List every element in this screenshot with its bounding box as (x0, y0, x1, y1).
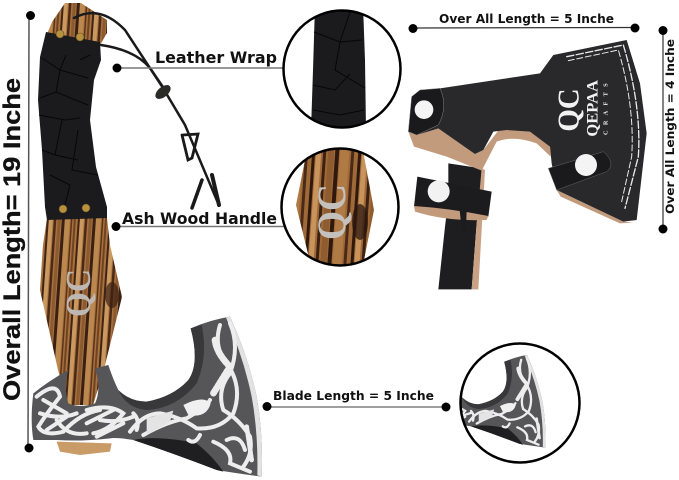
label: leather wrap: Leather Wrap (155, 48, 277, 67)
leather cord (74, 13, 219, 208)
leather sheath (408, 40, 647, 289)
rivet holes (408, 88, 611, 190)
sheath body (408, 40, 647, 222)
detail circle: leather wrap (284, 5, 400, 130)
dimension: sheath width (408, 11, 640, 33)
rivets (56, 30, 90, 213)
sheath logo: QC (551, 88, 585, 132)
handle logo: QC (59, 269, 98, 317)
detail circle: ash wood handle: QC (309, 184, 354, 240)
axe illustration (32, 3, 262, 477)
detail circle: ash wood handle (282, 145, 398, 270)
dark burn mark (105, 282, 119, 308)
strap loop (414, 177, 492, 232)
sheath lining (408, 125, 551, 171)
cord knot (153, 82, 173, 102)
leather wrap (38, 32, 107, 220)
lower wood handle (40, 218, 122, 405)
sheath strap (438, 163, 482, 289)
callout: ash wood handle (112, 209, 284, 231)
callout: blade length (262, 388, 450, 412)
axe head (32, 317, 262, 477)
label: ash wood handle: Ash Wood Handle (122, 209, 277, 228)
label: sheath width: Over All Length = 5 Inche (439, 11, 614, 26)
label: blade length: Blade Length = 5 Inche (273, 388, 434, 403)
dimension: overall length (0, 11, 35, 452)
handle top wood (47, 3, 107, 45)
label: sheath height: Over All Length = 4 Inche (663, 39, 677, 214)
brand name: QEPAA (584, 80, 601, 137)
detail circle: blade (459, 342, 581, 464)
dimension: sheath height (658, 26, 677, 234)
stitching (567, 45, 639, 208)
callout: leather wrap (112, 48, 284, 72)
brand subtitle: CRAFTS (602, 83, 609, 135)
